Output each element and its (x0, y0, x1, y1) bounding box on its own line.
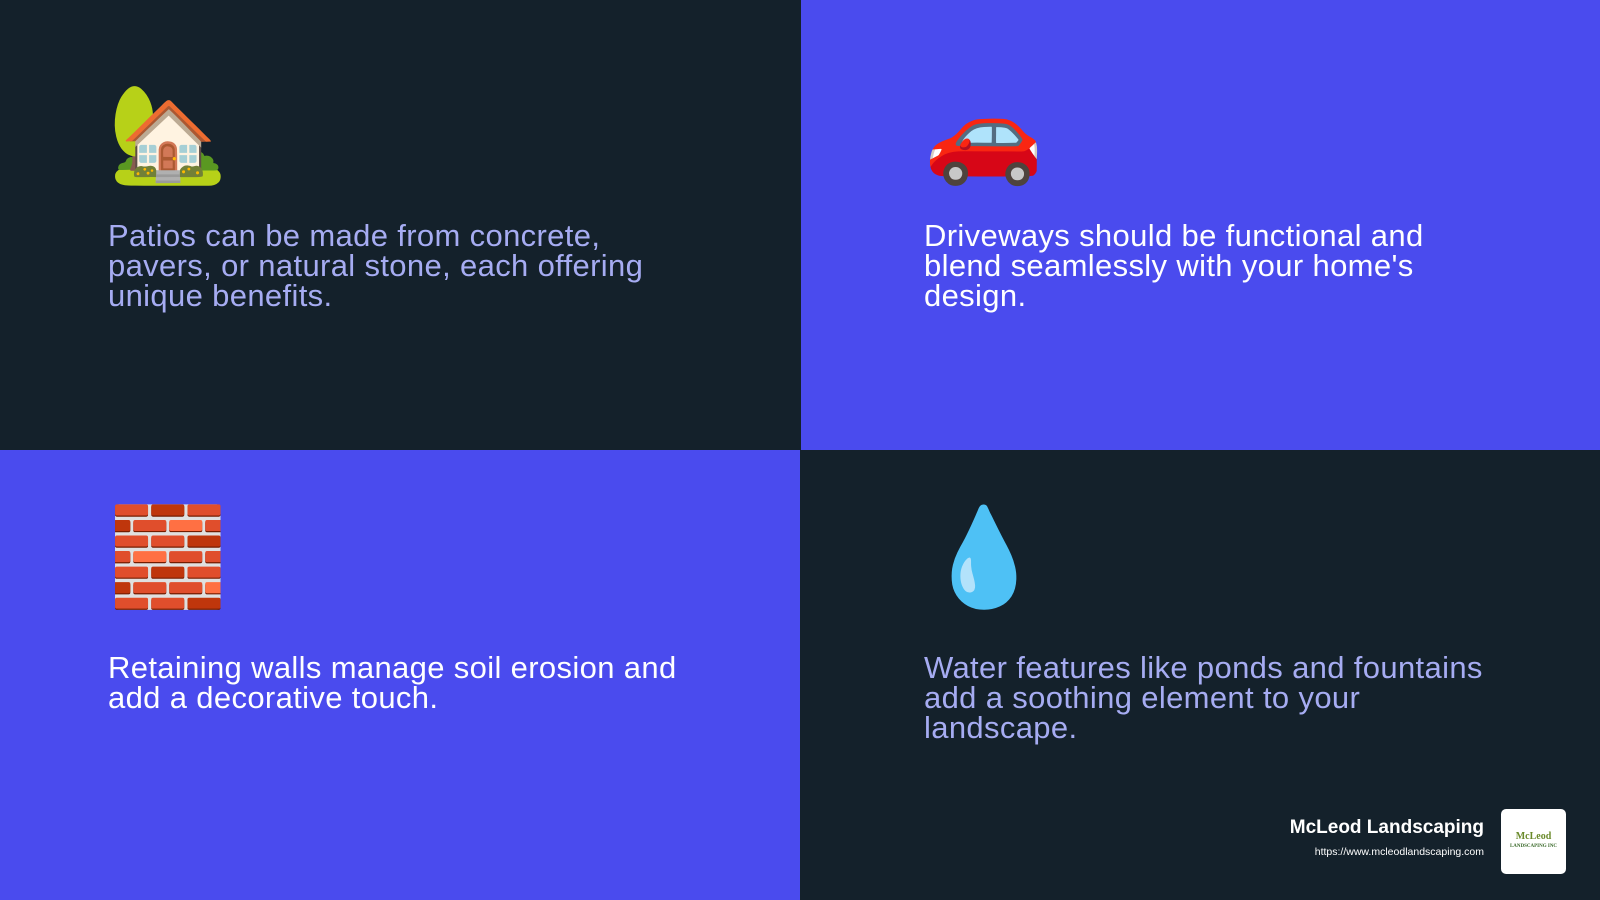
panel: patios (0, 0, 800, 450)
text: water features: Water features like ponds and fountains (924, 650, 1483, 685)
icon: house: 🏡 (108, 78, 228, 190)
text: retaining walls (108, 650, 677, 715)
logo: McLeod (1516, 831, 1551, 842)
text: driveways (924, 218, 1424, 313)
text: retaining walls: add a decorative touch. (108, 680, 438, 715)
panel: water features (801, 450, 1600, 900)
text: patios: unique benefits. (108, 278, 332, 313)
text: water features (924, 650, 1483, 745)
text: driveways: Driveways should be functional and (924, 218, 1424, 253)
text: water features: add a soothing element to your (924, 680, 1360, 715)
text: water features: landscape. (924, 710, 1077, 745)
brand block (1290, 809, 1566, 874)
text: patios: pavers, or natural stone, each offering (108, 248, 643, 283)
icon: brick: 🧱 (108, 502, 228, 614)
panel: retaining walls (0, 450, 800, 900)
text: driveways: design. (924, 278, 1026, 313)
brand url: https://www.mcleodlandscaping.com (1315, 846, 1484, 858)
text: driveways: blend seamlessly with your home's (924, 248, 1414, 283)
panel: driveways (801, 0, 1600, 450)
text: patios (108, 218, 643, 313)
logo: LANDSCAPING INC (1510, 844, 1557, 849)
text: retaining walls: Retaining walls manage soil erosion and (108, 650, 677, 685)
text: patios: Patios can be made from concrete, (108, 218, 600, 253)
icon: water drop: 💧 (924, 502, 1044, 614)
logo (1501, 809, 1566, 874)
brand name: McLeod Landscaping (1290, 817, 1484, 838)
icon: car: 🚗 (924, 78, 1044, 190)
